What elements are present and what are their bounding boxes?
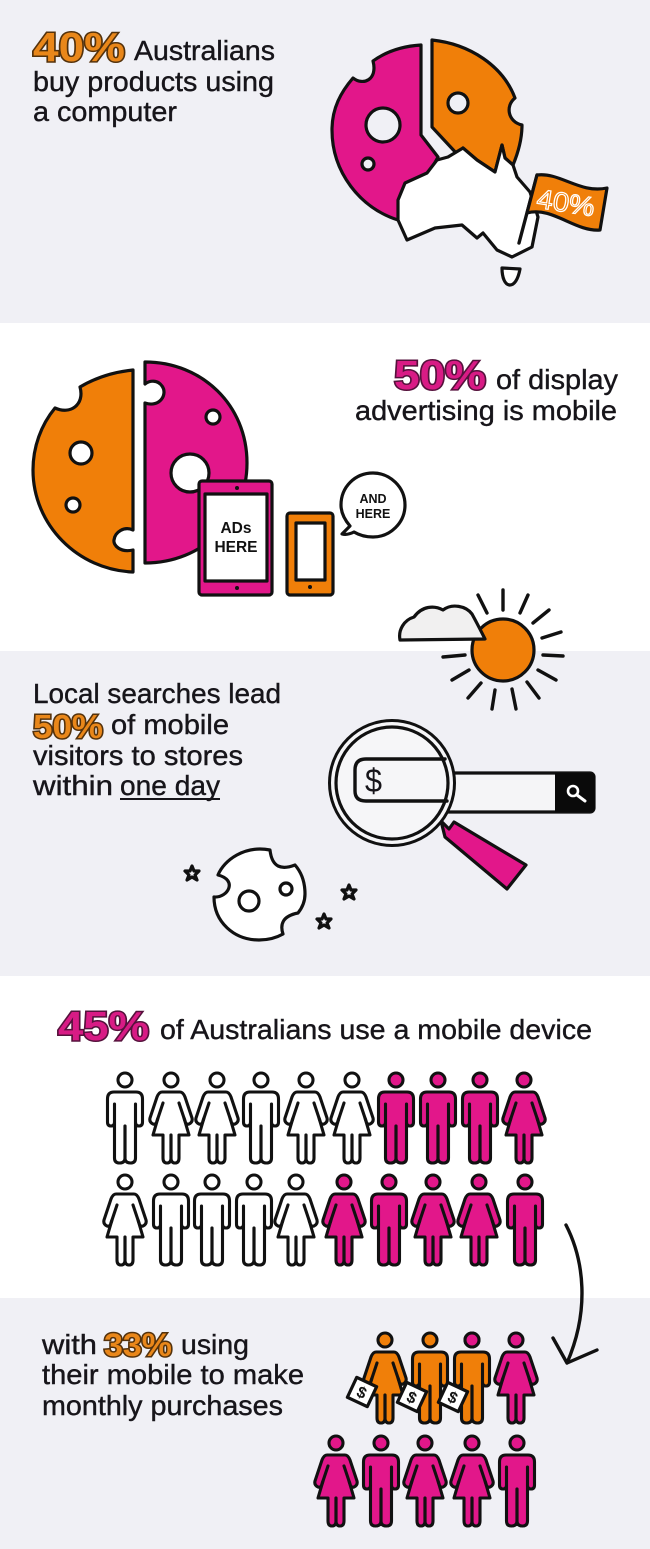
speech bubble: and here: AND	[359, 492, 387, 506]
icon: cloud	[400, 606, 485, 640]
icon: Tasmania	[502, 268, 520, 285]
pie slice: pink 60%	[332, 45, 438, 220]
arrow: curved down to purchases	[553, 1225, 597, 1363]
text: 40% Australians buy products using a computer: a computer	[33, 96, 177, 127]
text: 45% of Australians use a mobile device	[58, 1003, 592, 1049]
panel: display advertising	[0, 323, 650, 651]
icon: search bar	[440, 773, 595, 812]
text: 40% Australians buy products using a computer: 40%	[33, 24, 125, 70]
icon: 40% flag	[527, 175, 607, 230]
icon: moon	[214, 849, 305, 940]
text: 50% of display advertising is mobile	[355, 352, 618, 426]
icon: tablet with ads	[199, 481, 272, 595]
pie half: pink	[145, 362, 247, 563]
text: 50% of display advertising is mobile: advertising is mobile	[355, 395, 617, 426]
orange half holes	[66, 442, 92, 512]
pictogram row 2: people	[104, 1175, 543, 1265]
pink half holes	[171, 410, 220, 492]
icon: magnifying glass lens: $	[365, 762, 382, 799]
text: 40% Australians buy products using a computer: buy products using	[33, 66, 274, 97]
icon: 40% flag: 40%	[535, 184, 597, 222]
text: local searches lead 50% of mobile visitors to stores within one day: one day	[120, 770, 220, 801]
text: with 33% using their mobile to make monthly purchases: with	[41, 1329, 97, 1360]
text: local searches lead 50% of mobile visitors to stores within one day: Local searches lead	[33, 678, 281, 709]
panel: local searches	[0, 651, 650, 976]
panel: mobile device use	[0, 976, 650, 1298]
text: with 33% using their mobile to make monthly purchases: using	[181, 1329, 249, 1360]
pictogram row 1: people	[108, 1073, 545, 1163]
icons: stars	[185, 866, 356, 928]
icon: magnifying glass lens	[330, 720, 454, 846]
icons: shopping bags	[347, 1377, 468, 1412]
pie slice: orange 40%	[432, 40, 522, 172]
icons: shopping bags: $	[404, 1389, 419, 1408]
pie half: orange	[33, 370, 133, 572]
pie chart: 40% orange slice over Australia	[332, 40, 607, 285]
pictogram row 4: pink people	[315, 1436, 534, 1526]
pictogram row 3: orange buyers and pink person	[364, 1333, 537, 1423]
text: 40% Australians buy products using a computer	[33, 24, 275, 127]
pie chart: 50/50 split	[33, 362, 247, 572]
speech bubble: and here	[341, 473, 405, 537]
text: 50% of display advertising is mobile: of display	[496, 364, 618, 395]
pink slice holes	[362, 108, 400, 170]
text: 45% of Australians use a mobile device: 45%	[58, 1003, 149, 1049]
icon: Australia map	[398, 145, 538, 257]
text: 50% of display advertising is mobile: 50%	[394, 352, 486, 398]
text: 40% Australians buy products using a computer: Australians	[134, 35, 275, 66]
text: local searches lead 50% of mobile visitors to stores within one day: within	[32, 770, 113, 801]
text: with 33% using their mobile to make monthly purchases: 33%	[104, 1327, 172, 1363]
icons: shopping bags: $	[445, 1389, 460, 1408]
text: local searches lead 50% of mobile visitors to stores within one day: of mobile	[111, 709, 229, 740]
orange slice hole	[448, 93, 468, 113]
text: with 33% using their mobile to make monthly purchases	[41, 1327, 304, 1421]
speech bubble: and here: HERE	[356, 507, 390, 521]
panel: monthly purchases	[0, 1298, 650, 1549]
icon: tablet with ads: ADs	[220, 520, 252, 537]
text: local searches lead 50% of mobile visitors to stores within one day: visitors to stores	[33, 740, 243, 771]
panel: computer purchases	[0, 0, 650, 323]
icon: phone	[287, 513, 333, 595]
icon: flag pole	[519, 175, 537, 243]
text: local searches lead 50% of mobile visitors to stores within one day: 50%	[33, 708, 103, 745]
icon: tablet with ads: HERE	[214, 539, 258, 556]
icon: sun with rays	[443, 590, 563, 709]
icon: magnifying glass handle	[441, 821, 526, 889]
text: with 33% using their mobile to make monthly purchases: their mobile to make	[42, 1359, 304, 1390]
text: with 33% using their mobile to make monthly purchases: monthly purchases	[42, 1390, 283, 1421]
text: 45% of Australians use a mobile device: of Australians use a mobile device	[160, 1014, 592, 1045]
icons: shopping bags: $	[354, 1384, 369, 1403]
text: local searches lead 50% of mobile visitors to stores within one day	[32, 678, 281, 801]
